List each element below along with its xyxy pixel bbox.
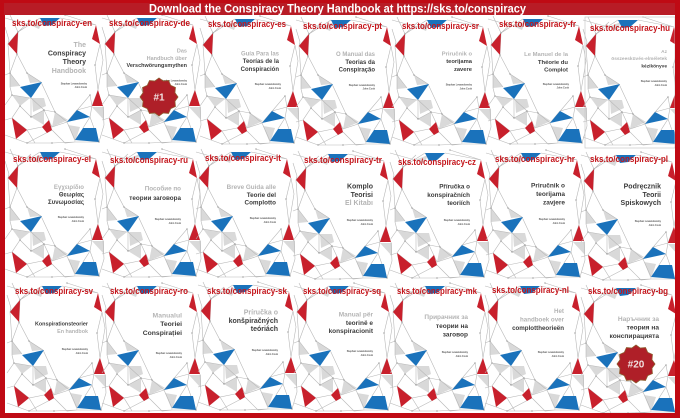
panel: cover ru: Stephan Lewandowsky bbox=[155, 218, 182, 221]
panel: cover el: Stephan Lewandowsky bbox=[58, 216, 85, 219]
panel: cover el bbox=[5, 148, 104, 278]
panel: cover ro bbox=[102, 282, 201, 412]
panel: cover bg: конспирацията bbox=[610, 333, 659, 340]
panel: cover bg: sks.to/conspiracy-bg bbox=[588, 286, 668, 296]
panel: cover es: John Cook bbox=[269, 87, 282, 90]
panel: cover sr: Stephan Lewandowsky bbox=[446, 84, 473, 86]
panel: cover it: Breve Guida alle bbox=[227, 184, 276, 191]
badge: #1 bbox=[140, 78, 178, 116]
panel: cover cz: Stephan Lewandowsky bbox=[444, 219, 471, 222]
panel: cover el: Θεωρίας bbox=[59, 192, 84, 198]
panel: cover sk: teóriách bbox=[251, 326, 278, 333]
panel: cover sq bbox=[294, 282, 393, 412]
panel: cover tr bbox=[293, 150, 392, 280]
panel: cover pl: Podręcznik bbox=[624, 184, 661, 190]
panel: cover bg: Наръчник за bbox=[618, 316, 659, 323]
panel: cover sv: En handbok bbox=[57, 329, 88, 335]
panel: cover de: Handbuch über bbox=[147, 56, 188, 62]
panel: cover hr: John Cook bbox=[553, 222, 566, 225]
panel: cover mk: Прирачник за bbox=[424, 314, 468, 321]
panel: cover fr: John Cook bbox=[557, 86, 570, 90]
panel: cover cz: John Cook bbox=[458, 223, 471, 226]
panel: cover ro: Manualul bbox=[153, 312, 182, 320]
panel: cover sr: zavere bbox=[454, 67, 473, 73]
panel: cover en: Theory bbox=[63, 59, 86, 66]
panel: cover nl: Stephan Lewandowsky bbox=[538, 351, 565, 354]
panel: cover hr: Stephan Lewandowsky bbox=[539, 218, 566, 221]
panel: cover mk: Stephan Lewandowsky bbox=[442, 351, 469, 354]
badge: #20: #20 bbox=[628, 360, 645, 370]
panel: cover ru bbox=[102, 148, 201, 278]
panel: cover sq: John Cook bbox=[361, 354, 374, 357]
panel: cover sv: sks.to/conspiracy-sv bbox=[15, 286, 94, 296]
panel: cover es: Stephan Lewandowsky bbox=[255, 83, 282, 86]
panel: cover sv: John Cook bbox=[76, 352, 89, 355]
panel: cover es: sks.to/conspiracy-es bbox=[208, 19, 286, 29]
panel: cover it: Complotto bbox=[245, 200, 276, 206]
panel: cover hr: zavjere bbox=[543, 200, 565, 206]
panel: cover tr: Komplo bbox=[347, 184, 373, 190]
panel: cover bg bbox=[581, 284, 680, 414]
panel: cover fr: Théorie du bbox=[538, 60, 568, 66]
panel: cover tr: Teorisi bbox=[351, 192, 373, 199]
panel: cover mk: John Cook bbox=[456, 355, 469, 358]
panel: cover es bbox=[200, 15, 299, 145]
badge: #20 bbox=[617, 345, 655, 383]
panel: cover pl: Teorii bbox=[642, 192, 661, 199]
panel: cover pl: sks.to/conspiracy-pl bbox=[590, 154, 668, 164]
panel: cover tr: John Cook bbox=[361, 223, 374, 226]
panel: cover mk: заговор bbox=[443, 332, 468, 338]
panel: cover sq: teorinë e bbox=[346, 320, 373, 327]
panel: cover sr: Priručnik o bbox=[442, 52, 472, 58]
title bar: Download the Conspiracy Theory Handbook at https://sks.to/conspiracy bbox=[149, 4, 527, 16]
panel: cover en: Handbook bbox=[52, 68, 86, 75]
panel: cover hu: kézikönyve bbox=[641, 64, 667, 70]
panel: cover de: Verschwörungsmythen bbox=[126, 63, 188, 69]
panel: cover hu bbox=[583, 16, 680, 148]
panel: cover nl: Het bbox=[554, 308, 564, 315]
panel: cover sr: John Cook bbox=[460, 88, 473, 90]
panel: cover ru: теории заговора bbox=[129, 195, 181, 202]
panel: cover de: sks.to/conspiracy-de bbox=[109, 18, 190, 28]
panel: cover el: sks.to/conspiracy-el bbox=[13, 154, 91, 164]
panel: cover it bbox=[196, 148, 295, 278]
panel: cover fr bbox=[488, 15, 587, 145]
badge: #1: #1 bbox=[153, 92, 165, 104]
panel: cover pt: O Manual das bbox=[336, 52, 376, 58]
panel: cover cz: sks.to/conspiracy-cz bbox=[398, 157, 476, 167]
panel: cover hr: teorijama bbox=[536, 191, 565, 198]
panel: cover cz: Příručka o bbox=[439, 184, 470, 190]
panel: cover sq: Stephan Lewandowsky bbox=[347, 350, 374, 353]
panel: cover sk: Stephan Lewandowsky bbox=[252, 349, 279, 352]
panel: cover nl bbox=[485, 282, 584, 412]
panel: cover el: Συνωμοσίας bbox=[48, 199, 84, 206]
panel: cover sk: konšpiračných bbox=[229, 318, 278, 325]
panel: cover mk bbox=[390, 282, 489, 412]
panel: cover de: Das bbox=[177, 48, 187, 54]
panel: cover it: Stephan Lewandowsky bbox=[250, 217, 277, 220]
panel: cover en: The bbox=[74, 42, 86, 49]
panel: cover de: Stephan Lewandowsky bbox=[161, 80, 188, 82]
panel: cover es: Guía Para las bbox=[241, 52, 280, 58]
panel: cover hr bbox=[486, 149, 585, 279]
panel: cover mk: sks.to/conspiracy-mk bbox=[397, 286, 478, 296]
panel: cover sr: sks.to/conspiracy-sr bbox=[402, 21, 479, 31]
panel: cover sk: sks.to/conspiracy-sk bbox=[207, 286, 288, 296]
panel: cover ro: Teoriei bbox=[160, 321, 182, 328]
panel: cover ro: sks.to/conspiracy-ro bbox=[110, 286, 188, 296]
panel: cover it: Teorie del bbox=[247, 192, 276, 199]
panel: cover hu: Stephan Lewandowsky bbox=[641, 80, 668, 83]
panel: cover sv: Konspirationsteorier bbox=[35, 322, 89, 328]
panel: cover ro: John Cook bbox=[170, 356, 183, 359]
panel: cover de: John Cook bbox=[175, 83, 188, 86]
panel: cover sq: sks.to/conspiracy-sq bbox=[303, 286, 381, 296]
panel: cover sq: Manual për bbox=[339, 312, 373, 318]
panel: cover sr bbox=[392, 16, 491, 146]
panel: cover pt bbox=[296, 16, 395, 146]
title bar bbox=[4, 3, 675, 16]
panel: cover cz: teoriích bbox=[447, 200, 470, 207]
panel: cover bg: теория на bbox=[627, 324, 659, 332]
panel: cover es: Conspiración bbox=[241, 67, 279, 73]
panel: cover pl bbox=[581, 151, 680, 281]
panel: cover cz bbox=[390, 149, 489, 279]
panel: cover ro: Conspirației bbox=[143, 330, 182, 337]
panel: cover nl: complottheorieën bbox=[512, 325, 564, 332]
panel: cover pt: Conspiração bbox=[339, 68, 375, 74]
panel: cover ru: John Cook bbox=[169, 222, 182, 225]
panel: cover fr: Complot bbox=[544, 68, 568, 74]
panel: cover fr: Le Manuel de la bbox=[524, 52, 569, 58]
panel: cover ru: Пособие по bbox=[145, 184, 181, 192]
panel: cover pt: Teorias da bbox=[345, 60, 376, 66]
panel: cover nl: handboek over bbox=[520, 316, 565, 324]
panel: cover hu: sks.to/conspiracy-hu bbox=[590, 23, 670, 33]
panel: cover hr: sks.to/conspiracy-hr bbox=[495, 154, 575, 164]
panel: cover en bbox=[5, 14, 104, 144]
panel: cover pl: Stephan Lewandowsky bbox=[635, 220, 662, 223]
panel: cover sk bbox=[198, 281, 297, 411]
panel: cover pl: Spiskowych bbox=[621, 200, 661, 207]
panel: cover pt: sks.to/conspiracy-pt bbox=[303, 21, 382, 31]
panel: cover hr: Priručnik o bbox=[531, 182, 565, 190]
panel: cover sv bbox=[7, 282, 106, 412]
panel: cover hu: Az bbox=[661, 49, 668, 55]
panel: cover el: John Cook bbox=[72, 220, 85, 223]
panel: cover es: Teorías de la bbox=[243, 59, 280, 65]
panel: cover mk: теории на bbox=[436, 323, 468, 330]
panel: cover pt: Stephan Lewandowsky bbox=[349, 84, 376, 87]
panel: cover en: sks.to/conspiracy-en bbox=[12, 18, 92, 28]
panel: cover sr: teorijama bbox=[446, 59, 473, 65]
panel: cover nl: sks.to/conspiracy-nl bbox=[492, 285, 569, 295]
panel: cover cz: konspiračních bbox=[427, 192, 470, 199]
panel: cover en: Conspiracy bbox=[48, 50, 86, 58]
panel: cover tr: Stephan Lewandowsky bbox=[347, 219, 374, 222]
panel: cover el: Εγχειρίδιο bbox=[54, 184, 84, 191]
panel: cover en: Stephan Lewandowsky bbox=[61, 82, 88, 86]
panel: cover it: John Cook bbox=[264, 221, 277, 224]
panel: cover sk: Príručka o bbox=[244, 310, 278, 316]
panel: cover sq: konspiracionit bbox=[329, 328, 374, 335]
panel: cover pl: John Cook bbox=[649, 224, 662, 227]
panel: cover de bbox=[102, 14, 201, 144]
panel: cover fr: Stephan Lewandowsky bbox=[543, 83, 570, 86]
panel: cover en: John Cook bbox=[75, 86, 88, 89]
panel: cover tr: sks.to/conspiracy-tr bbox=[304, 155, 382, 165]
panel: cover hu: John Cook bbox=[655, 84, 668, 87]
panel: cover pt: John Cook bbox=[363, 88, 376, 90]
panel: cover fr: sks.to/conspiracy-fr bbox=[499, 19, 576, 29]
panel: cover ro: Stephan Lewandowsky bbox=[156, 352, 183, 355]
panel: cover sk: John Cook bbox=[266, 353, 279, 356]
panel: cover ru: sks.to/conspiracy-ru bbox=[110, 155, 188, 165]
panel: cover hu: összeesküvés-elméletek bbox=[611, 56, 667, 62]
panel: cover sv: Stephan Lewandowsky bbox=[62, 348, 89, 351]
panel: cover nl: John Cook bbox=[552, 355, 565, 358]
panel: cover tr: El Kitabı bbox=[345, 200, 373, 207]
panel: cover it: sks.to/conspiracy-it bbox=[205, 153, 281, 163]
